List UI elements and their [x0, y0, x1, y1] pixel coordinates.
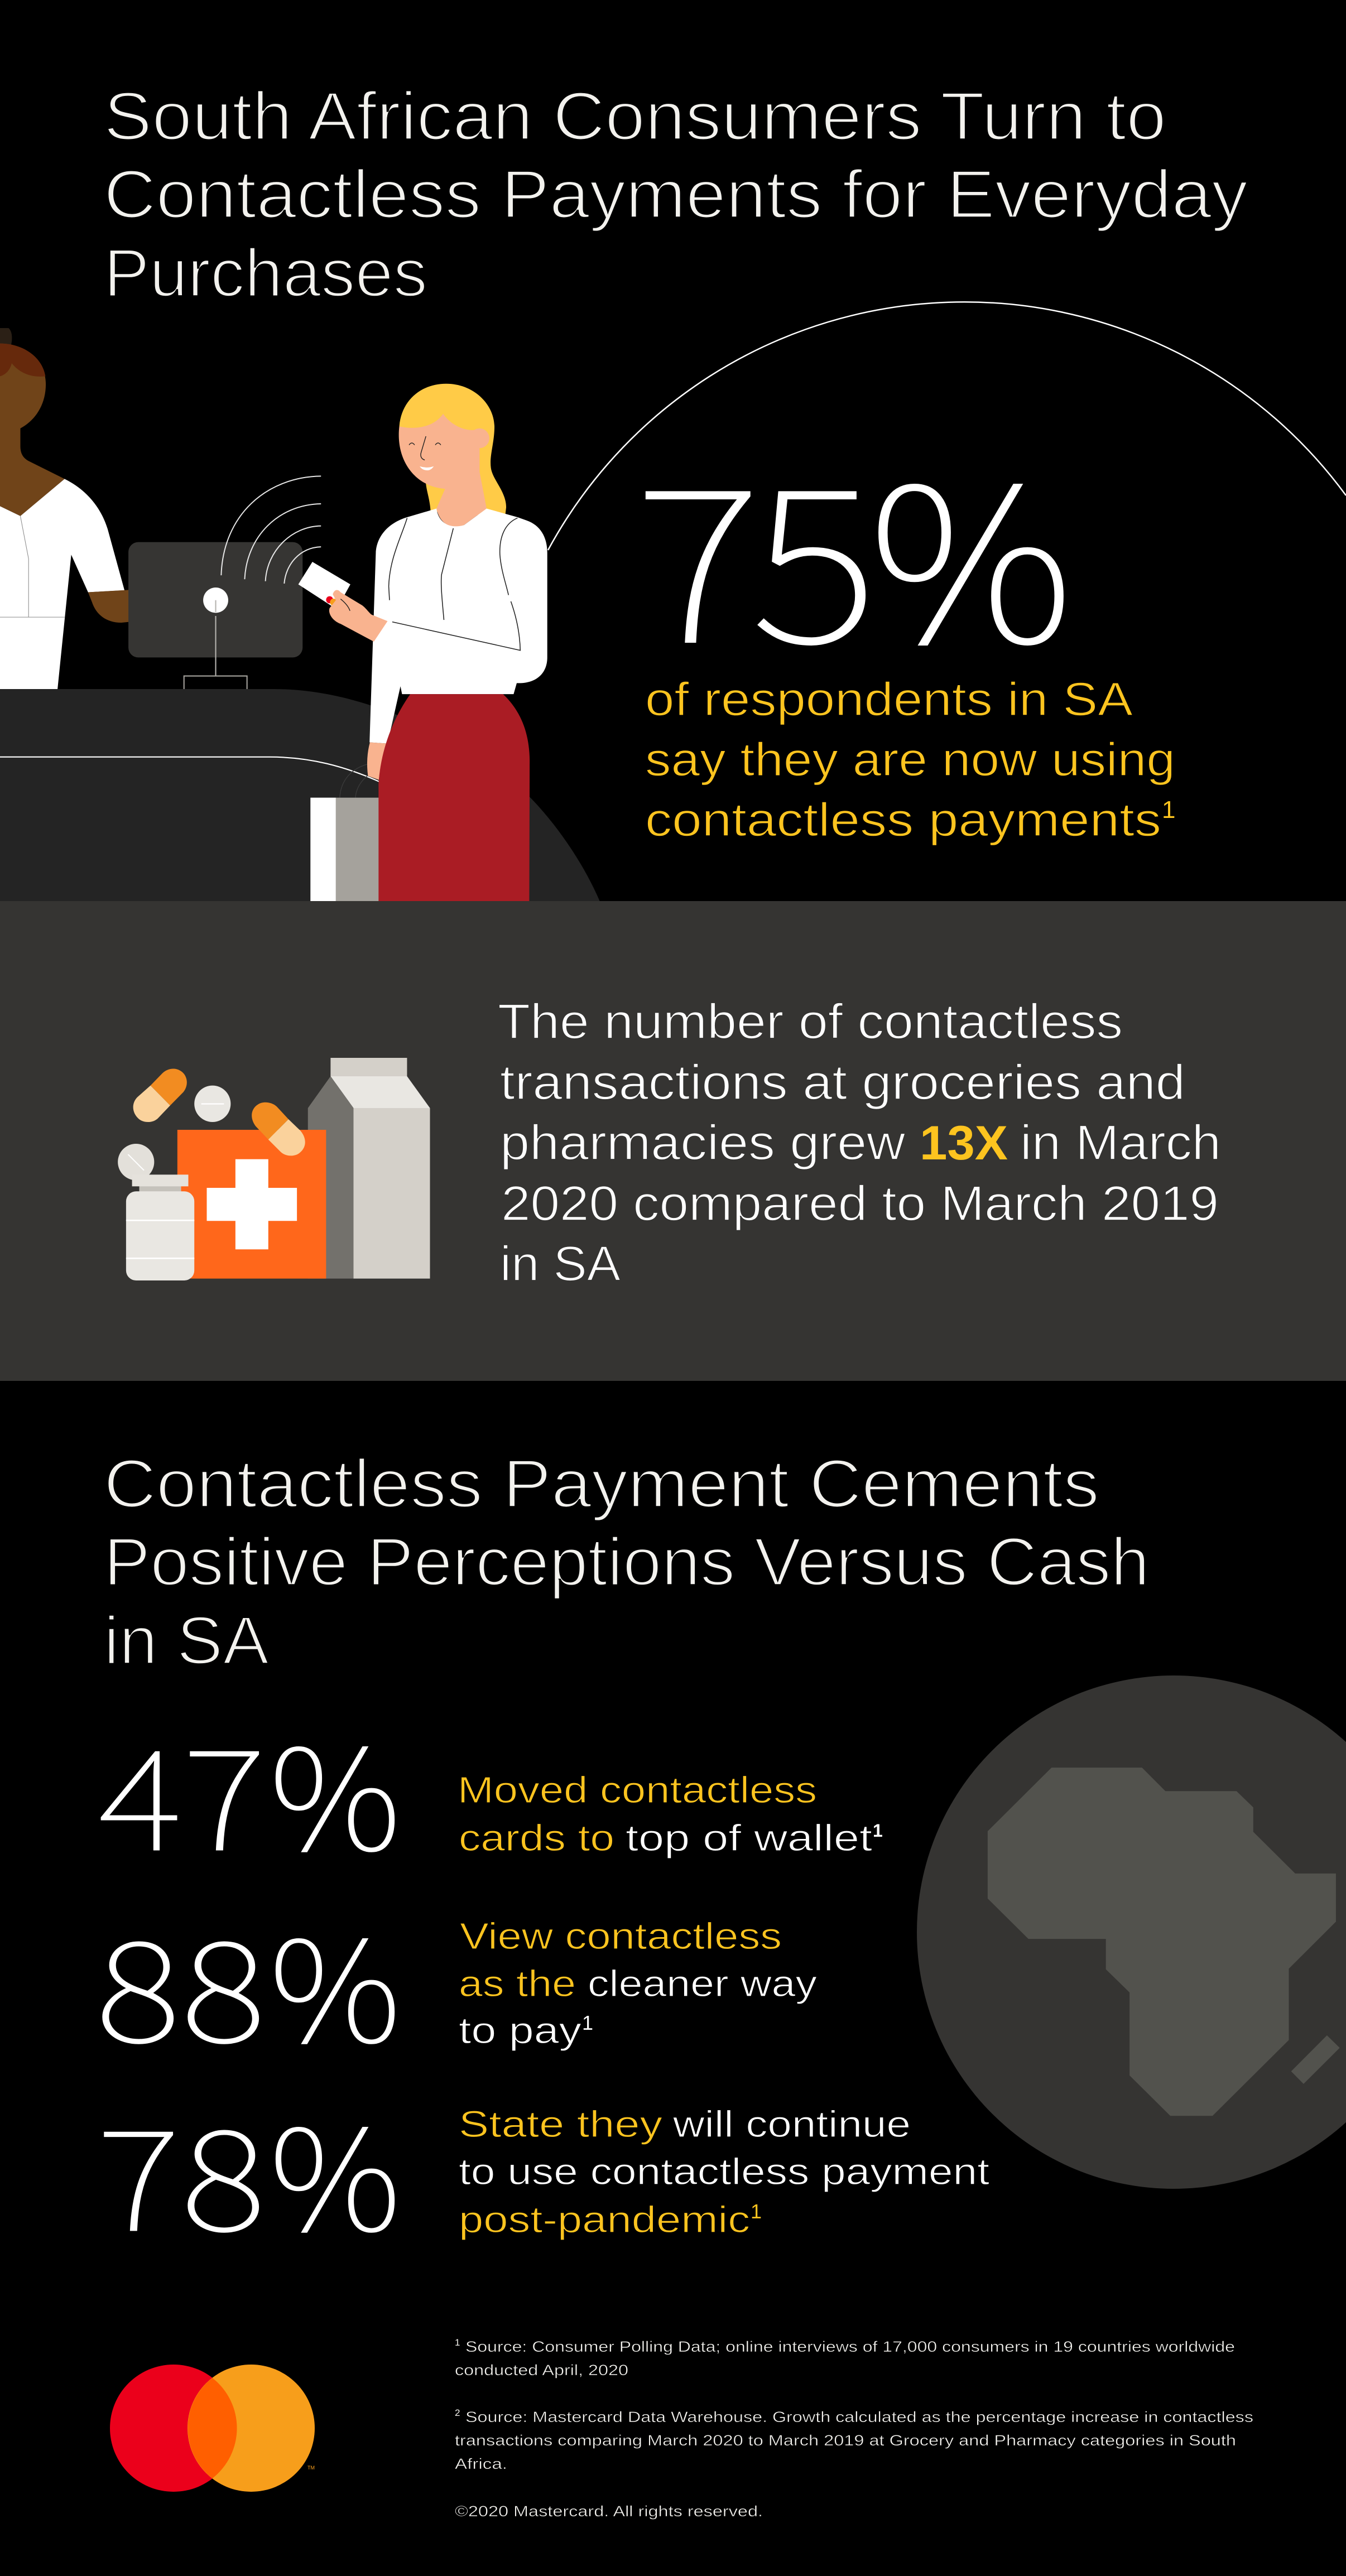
statistic: 78% — [97, 2069, 401, 2271]
heading: positive perceptions: in SA — [104, 1602, 270, 1678]
title — [104, 78, 1248, 311]
footnotes: Source: Mastercard Data Warehouse. Growth calculated as the percentage increase in contactless — [465, 2409, 1253, 2425]
medical box — [177, 1130, 326, 1279]
footnotes: 1 — [455, 2337, 460, 2348]
payment terminal — [128, 542, 302, 689]
text: moved contactless cards: Moved contactless — [458, 1769, 817, 1811]
title: South African Consumers Turn to — [104, 78, 1166, 154]
heading: positive perceptions: Positive Perceptions Versus Cash — [104, 1524, 1150, 1600]
text: continue post-pandemic: State they — [459, 2103, 663, 2145]
text: cleaner way to pay — [459, 1915, 818, 2052]
statistic caption — [645, 673, 1175, 846]
statistic: 88%: 8 — [95, 1880, 181, 2083]
icon: medicine and milk carton — [118, 1058, 430, 1280]
text: cleaner way to pay: as the — [459, 1963, 576, 2005]
Mastercard logo: TM — [307, 2465, 315, 2471]
panel text: in March — [1020, 1115, 1221, 1170]
statistic caption: say they are now using — [645, 733, 1175, 786]
tablet — [194, 1086, 230, 1122]
panel text — [498, 994, 1221, 1291]
footnotes: Africa. — [455, 2455, 507, 2472]
statistic: 75% — [634, 395, 1074, 704]
text: cleaner way to pay: View contactless — [460, 1915, 782, 1957]
capsule — [133, 1069, 187, 1122]
text: moved contactless cards: top of wallet — [626, 1817, 872, 1859]
checkout illustration — [0, 328, 600, 901]
statistic caption: of respondents in SA — [645, 673, 1133, 725]
shopping bag — [310, 764, 379, 901]
statistic caption: 1 — [1162, 796, 1175, 824]
statistic: 47%: % — [269, 1688, 401, 1891]
statistic: 75%: 7 — [634, 395, 761, 704]
panel text: pharmacies grew — [500, 1115, 905, 1170]
icon: globe with Africa — [917, 1675, 1346, 2189]
milk carton — [308, 1058, 430, 1279]
statistic: 88% — [95, 1880, 401, 2083]
pill bottle — [126, 1174, 194, 1280]
contactless waves — [221, 476, 321, 584]
panel text: 2020 compared to March 2019 — [501, 1176, 1219, 1231]
arc line behind statistic — [548, 302, 1346, 550]
text: continue post-pandemic: will continue — [672, 2103, 911, 2145]
title: Contactless Payments for Everyday — [104, 156, 1248, 232]
panel: groceries and pharmacies — [0, 901, 1346, 1381]
counter — [0, 689, 600, 901]
text: cleaner way to pay: cleaner way — [588, 1963, 818, 2005]
statistic: 47% — [98, 1688, 401, 1891]
statistic caption: contactless payments — [645, 793, 1161, 846]
heading: positive perceptions — [104, 1446, 1150, 1678]
footnotes: transactions comparing March 2020 to March 2019 at Grocery and Pharmacy categories in South — [455, 2432, 1236, 2449]
footnotes: ©2020 Mastercard. All rights reserved. — [455, 2503, 763, 2520]
counter line — [0, 757, 379, 782]
statistic: 88%: % — [269, 1880, 401, 2083]
Mastercard logo — [110, 2365, 315, 2492]
footnotes: Source: Consumer Polling Data; online interviews of 17,000 consumers in 19 countries worldwide — [465, 2338, 1235, 2355]
text: moved contactless cards — [458, 1769, 883, 1859]
text: continue post-pandemic: 1 — [751, 2200, 762, 2223]
statistic: 47%: 7 — [182, 1688, 266, 1891]
statistic: 78%: 7 — [97, 2069, 180, 2271]
panel text: 13X — [920, 1116, 1008, 1170]
statistic: 75%: % — [868, 395, 1074, 704]
statistic: 47%: 4 — [98, 1688, 182, 1891]
heading: positive perceptions: Contactless Payment Cements — [104, 1446, 1099, 1521]
capsule — [252, 1102, 305, 1155]
statistic: 78%: % — [269, 2069, 401, 2271]
panel text: The number of contactless — [498, 994, 1123, 1049]
tablet — [118, 1144, 154, 1180]
panel text: in SA — [500, 1236, 621, 1291]
statistic: 88%: 8 — [181, 1880, 266, 2083]
panel text: transactions at groceries and — [500, 1055, 1185, 1110]
cashier — [0, 328, 129, 689]
text: continue post-pandemic — [459, 2103, 989, 2241]
statistic: 75%: 5 — [751, 395, 878, 704]
text: moved contactless cards: cards to — [459, 1817, 614, 1859]
text: moved contactless cards: 1 — [873, 1821, 883, 1841]
text: cleaner way to pay: 1 — [582, 2011, 593, 2034]
footnotes: conducted April, 2020 — [455, 2362, 628, 2378]
customer — [299, 384, 547, 901]
title: Purchases — [104, 235, 427, 311]
footnotes: 2 — [455, 2408, 460, 2418]
statistic: 78%: 8 — [181, 2069, 266, 2271]
text: continue post-pandemic: post-pandemic — [459, 2199, 750, 2241]
text: cleaner way to pay: to pay — [459, 2010, 582, 2052]
footnotes — [455, 2337, 1253, 2520]
text: continue post-pandemic: to use contactless payment — [459, 2151, 989, 2193]
